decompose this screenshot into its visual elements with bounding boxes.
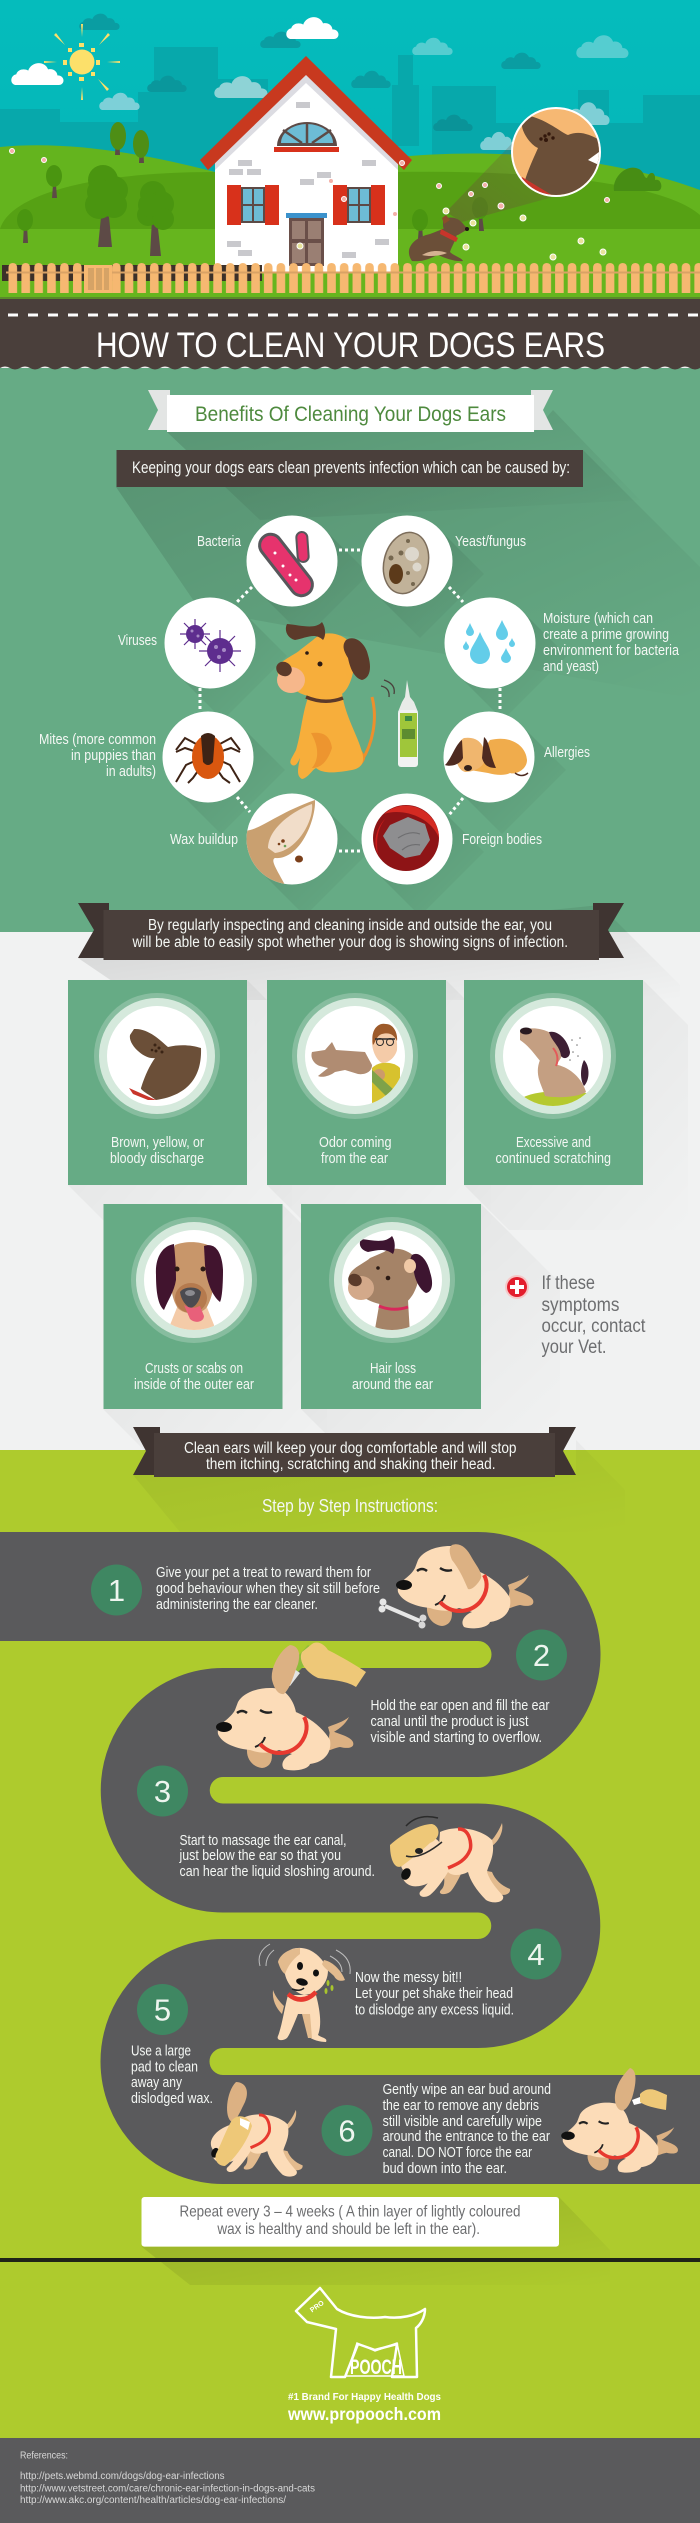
step 2 number [516, 1630, 567, 1680]
step 6 text: bud down into the ear. [383, 2161, 507, 2177]
magnifier beam [446, 135, 560, 222]
step 4 shaking dog [259, 1944, 350, 2042]
references [0, 2438, 700, 2523]
banner 3: Clean ears will keep your dog comfortable and will stop [184, 1440, 516, 1457]
label: mites: in adults) [106, 764, 156, 780]
vet note: your Vet. [542, 1336, 606, 1358]
label: foreign bodies: Foreign bodies [462, 832, 542, 848]
card: hair loss: Hair loss [370, 1361, 416, 1377]
circle: bacteria [246, 516, 338, 606]
step 6 text: Gently wipe an ear bud around [383, 2082, 551, 2098]
magnifier: ear close-up [511, 107, 601, 197]
repeat note [142, 2197, 559, 2247]
label: viruses: Viruses [118, 633, 157, 649]
sun [44, 24, 120, 100]
circle: mites [162, 712, 254, 802]
flowers [10, 148, 610, 260]
step 5 dog with pad [210, 2082, 303, 2177]
note box shadow [142, 2197, 610, 2285]
banner 2: By regularly inspecting and cleaning inside and outside the ear, you [148, 917, 552, 934]
step 6 number [322, 2105, 372, 2156]
references: References: [20, 2450, 68, 2462]
step 3 text: just below the ear so that you [179, 1848, 341, 1864]
logo: PRO [309, 2299, 326, 2314]
intro bar: Keeping your dogs ears clean prevents infection which can be caused by: [132, 459, 570, 477]
card: crusts: inside of the outer ear [134, 1377, 254, 1393]
long shadows: green section [78, 410, 700, 1000]
step 3 dog with hand [390, 1817, 510, 1902]
logo: POOCH [350, 2356, 402, 2379]
step 2 text [370, 1698, 550, 1746]
circle: wax buildup [240, 794, 338, 885]
card: discharge [68, 980, 247, 1185]
circle: yeast [362, 516, 452, 606]
step 6 text: still visible and carefully wipe [383, 2114, 542, 2130]
card: crusts [104, 1204, 282, 1409]
step 5 text: away any [131, 2075, 183, 2091]
step 3 text: Start to massage the ear canal, [180, 1833, 346, 1849]
bottle [398, 680, 418, 767]
circle: foreign bodies [362, 794, 452, 884]
step 5 number [137, 1984, 188, 2035]
step 6 dog with ear bud [561, 2068, 678, 2173]
vet note: symptoms [542, 1294, 620, 1316]
circle: viruses [164, 598, 256, 688]
vet note: occur, contact [542, 1315, 646, 1337]
references: http://www.vetstreet.com/care/chronic-ear-infection-in-dogs-and-cats [20, 2483, 315, 2494]
step 6 number: 6 [338, 2114, 356, 2148]
banner 2: will be able to easily spot whether your dog is showing signs of infection. [132, 934, 568, 951]
card: scratching: continued scratching [496, 1151, 611, 1167]
intro bar [116, 450, 583, 487]
repeat note: Repeat every 3 – 4 weeks ( A thin layer of lightly coloured [180, 2204, 520, 2220]
card: hair loss [301, 1204, 481, 1409]
step 5 text [131, 2044, 213, 2107]
label: moisture [543, 611, 680, 675]
card: hair loss: around the ear [352, 1377, 433, 1393]
card shadows [68, 980, 688, 1454]
step 4 [259, 1928, 562, 2042]
heading: steps: Step by Step Instructions: [262, 1495, 438, 1516]
dotted connectors [200, 550, 500, 851]
step 1 number: 1 [108, 1573, 125, 1608]
card: discharge: bloody discharge [110, 1151, 204, 1167]
road title band [0, 299, 700, 370]
label: allergies: Allergies [544, 745, 590, 761]
central dog [274, 622, 394, 779]
card: odor [267, 980, 446, 1185]
label: bacteria: Bacteria [197, 534, 242, 550]
card: scratching [464, 980, 643, 1185]
step 2 text: visible and starting to overflow. [370, 1730, 542, 1746]
step 5 text: dislodged wax. [131, 2091, 213, 2107]
vet note [542, 1272, 646, 1358]
tagline: #1 Brand For Happy Health Dogs [288, 2391, 441, 2403]
references: http://www.akc.org/content/health/articles/dog-ear-infections/ [20, 2495, 286, 2506]
step 5 number: 5 [154, 1992, 171, 2028]
step 4 text: Let your pet shake their head [355, 1986, 513, 2002]
step 6 [322, 2068, 678, 2177]
divider [0, 2258, 700, 2262]
winding road [0, 1586, 700, 2130]
step 3 text: can hear the liquid sloshing around. [180, 1864, 375, 1880]
references: http://pets.webmd.com/dogs/dog-ear-infections [20, 2471, 225, 2482]
step 2 text: Hold the ear open and fill the ear [370, 1698, 550, 1714]
circle: allergies [444, 712, 534, 802]
step 4 number [510, 1928, 562, 1980]
banner 2 [78, 903, 624, 960]
ribbon heading: benefits [148, 390, 553, 432]
title: HOW TO CLEAN YOUR DOGS EARS [96, 326, 605, 365]
step 1 dog with bone [378, 1544, 533, 1628]
repeat note: wax is healthy and should be left in the ear). [217, 2221, 480, 2238]
card: crusts: Crusts or scabs on [145, 1361, 243, 1377]
card: scratching: Excessive and [516, 1135, 591, 1151]
label: wax buildup: Wax buildup [170, 832, 238, 848]
step 1 text: good behaviour when they sit still before [156, 1581, 380, 1597]
vet note: If these [542, 1272, 595, 1294]
hero illustration [0, 0, 700, 300]
logo [296, 2288, 425, 2379]
clouds [11, 14, 629, 150]
step 1 text: administering the ear cleaner. [156, 1597, 318, 1613]
step 2 text: canal until the product is just [370, 1714, 528, 1730]
step 1 number [91, 1564, 142, 1616]
step 6 text: around the entrance to the ear [383, 2129, 550, 2145]
label: moisture: and yeast) [543, 659, 599, 675]
circle: moisture [444, 598, 536, 688]
step 2 [216, 1630, 567, 1770]
step 4 number: 4 [527, 1937, 545, 1972]
card: odor: Odor coming [319, 1135, 392, 1151]
step 6 text: canal. DO NOT force the ear [383, 2145, 532, 2161]
label: moisture: Moisture (which can [543, 611, 653, 627]
step 4 text: Now the messy bit!! [355, 1970, 462, 1986]
label: yeast: Yeast/fungus [455, 534, 526, 550]
ribbon heading: benefits: Benefits Of Cleaning Your Dogs Ears [195, 403, 506, 426]
step 3 number: 3 [154, 1774, 171, 1809]
step 6 text [383, 2082, 551, 2177]
step 5 text: Use a large [131, 2044, 191, 2060]
step 6 text: the ear to remove any debris [383, 2098, 539, 2114]
icon: red cross [505, 1275, 529, 1299]
banner 3: them itching, scratching and shaking their head. [206, 1456, 496, 1473]
label: mites [39, 732, 156, 780]
step 5 [131, 1984, 303, 2177]
city skyline [0, 47, 700, 220]
step 3 [137, 1766, 510, 1902]
step 1 text: Give your pet a treat to reward them for [156, 1565, 371, 1581]
step 1 text [156, 1565, 380, 1613]
label: mites: Mites (more common [39, 732, 156, 748]
step 4 text [355, 1970, 514, 2018]
step 3 number [137, 1766, 188, 1816]
step 5 text: pad to clean [131, 2059, 198, 2075]
label: moisture: environment for bacteria [543, 643, 680, 659]
banner 3 [133, 1427, 625, 1532]
step 2 number: 2 [533, 1638, 550, 1673]
sky [0, 0, 700, 300]
fence [2, 263, 700, 293]
step 1 [91, 1544, 533, 1628]
icon: brown dog in yard [409, 215, 469, 261]
label: moisture: create a prime growing [543, 627, 669, 643]
card: discharge: Brown, yellow, or [111, 1135, 204, 1151]
card: odor: from the ear [321, 1151, 388, 1167]
label: mites: in puppies than [71, 748, 156, 764]
step 3 text [179, 1833, 375, 1880]
website: www.propooch.com [287, 2404, 441, 2424]
step 2 dog with bottle [216, 1643, 366, 1770]
trees [17, 122, 661, 256]
hills [0, 145, 215, 240]
house [200, 56, 412, 272]
step 4 text: to dislodge any excess liquid. [355, 2002, 514, 2018]
